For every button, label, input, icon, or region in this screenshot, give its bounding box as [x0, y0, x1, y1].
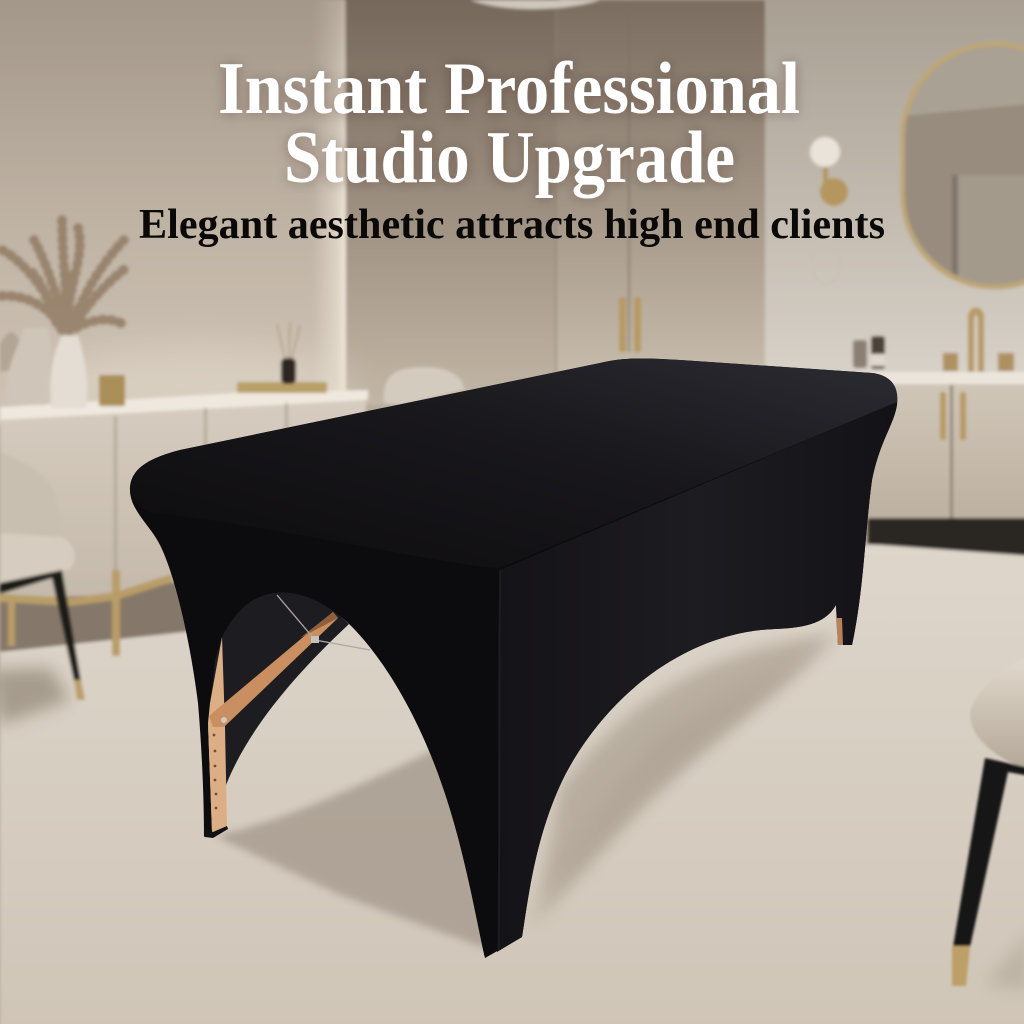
title [218, 48, 800, 199]
right foreground chair [952, 655, 1024, 986]
cover side panel [497, 402, 897, 952]
vase with dried flowers [0, 214, 126, 408]
foreground chair floor shadow [985, 930, 1024, 990]
wooden folding leg and brace [204, 595, 370, 838]
candle and diffuser [99, 322, 327, 406]
subtitle: Elegant aesthetic attracts high end clients [139, 202, 885, 248]
title: Instant Professional [218, 48, 800, 130]
ceiling recess [470, 0, 600, 9]
back wall: left niche [0, 0, 347, 425]
back wall: centre [345, 0, 560, 405]
front edge seam [499, 570, 500, 950]
product: covered massage table [130, 358, 897, 958]
cover top surface [130, 358, 897, 568]
heading block [139, 48, 885, 248]
left sideboard [0, 390, 368, 656]
vanity counter and cabinets [853, 308, 1024, 556]
cover silhouette with arches [130, 358, 897, 958]
far cloth seen through arch [200, 580, 349, 785]
mirror [903, 44, 1024, 290]
wall sconce [810, 137, 848, 284]
right wall [765, 0, 1024, 380]
under-cabinet floor shadow [0, 570, 190, 658]
floor [0, 545, 1024, 1024]
table shadow on floor [215, 632, 838, 950]
left armchair [0, 452, 85, 700]
tall cabinet doors [555, 0, 767, 372]
title: Studio Upgrade [284, 117, 735, 199]
shadow under left chair [0, 668, 70, 725]
niche light strip [318, 0, 348, 392]
far chair behind table [384, 367, 464, 405]
wall glow [50, 345, 350, 425]
wooden leg far right [836, 618, 843, 645]
